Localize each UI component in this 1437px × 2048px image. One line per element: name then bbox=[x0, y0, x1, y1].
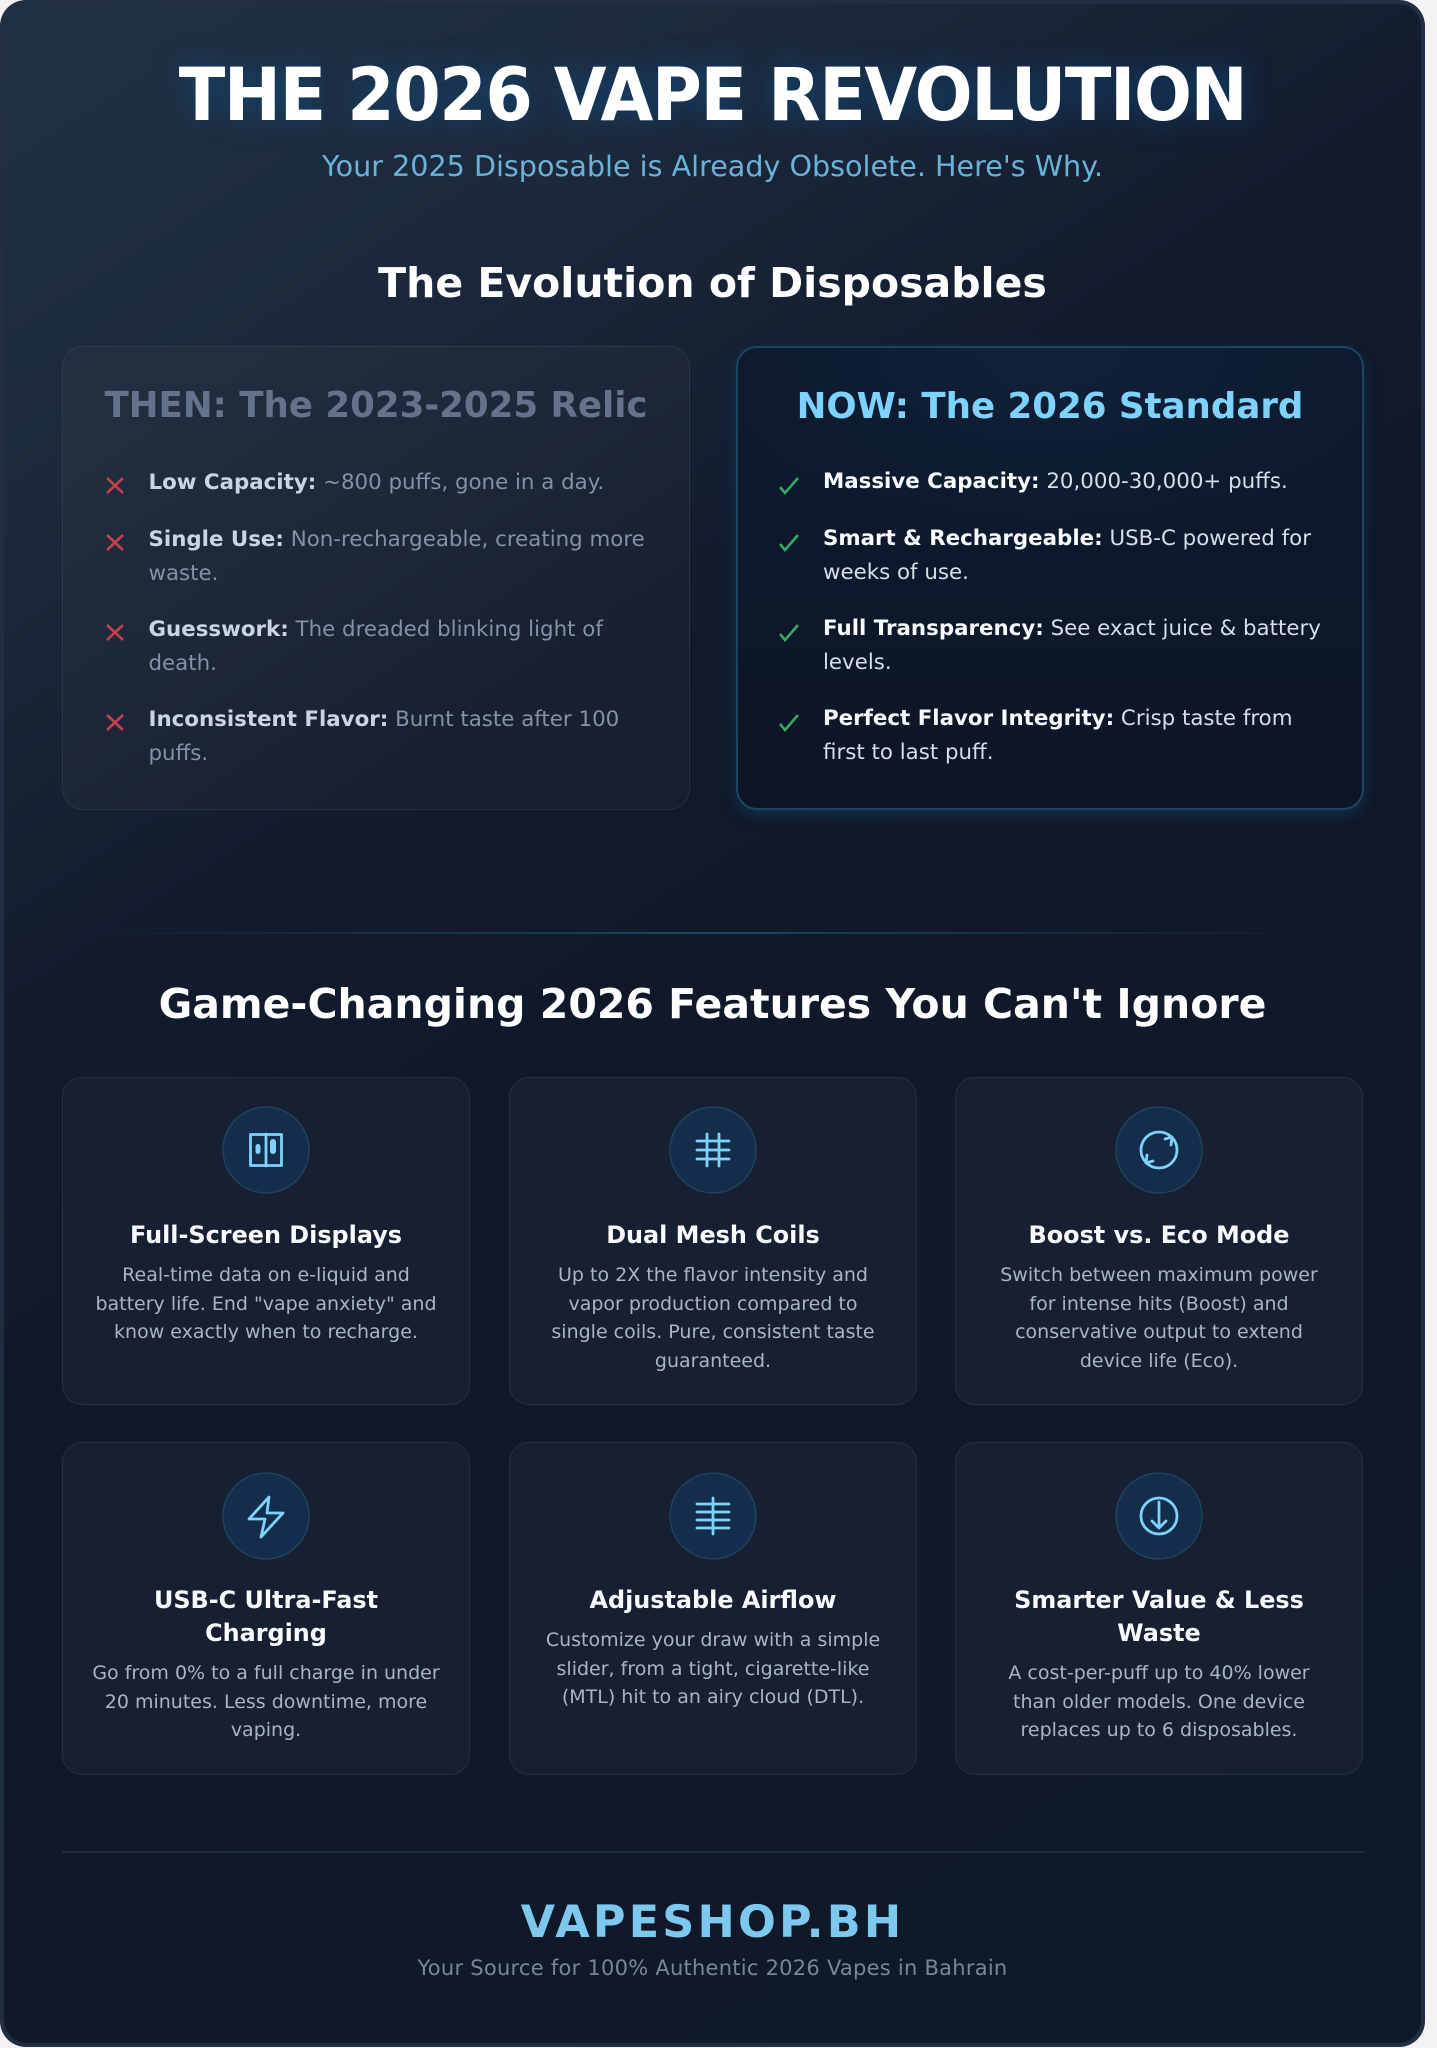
icon: down arrow in circle bbox=[1115, 1472, 1203, 1560]
list item: perfect flavor integrity: Perfect Flavor Integrity: Crisp taste from bbox=[823, 706, 1292, 731]
card text: single coils. Pure, consistent taste bbox=[551, 1321, 875, 1343]
card: full-screen displays bbox=[62, 1077, 470, 1405]
card heading: Full-Screen Displays bbox=[130, 1221, 402, 1249]
list item: single use: waste. bbox=[148, 561, 218, 586]
icon: red cross bbox=[106, 624, 124, 641]
list item: full transparency: Full Transparency: See exact juice & battery bbox=[823, 616, 1321, 641]
icon: green check bbox=[779, 477, 799, 495]
panel: now bbox=[736, 346, 1364, 810]
icon: green check bbox=[779, 534, 799, 552]
list item: inconsistent flavor: puffs. bbox=[148, 741, 208, 766]
footer tagline: Your Source for 100% Authentic 2026 Vapes in Bahrain bbox=[418, 1956, 1007, 1980]
list item: inconsistent flavor: Inconsistent Flavor: Burnt taste after 100 bbox=[148, 706, 619, 732]
card text bbox=[1008, 1662, 1310, 1741]
card heading: Boost vs. Eco Mode bbox=[1029, 1221, 1289, 1249]
list item: full transparency: levels. bbox=[823, 650, 892, 675]
card text: Customize your draw with a simple bbox=[546, 1629, 880, 1651]
subtitle: Your 2025 Disposable is Already Obsolete. Here's Why. bbox=[322, 149, 1103, 183]
list item: smart and rechargeable: Smart & Rechargeable: USB-C powered for bbox=[823, 526, 1311, 551]
list item: perfect flavor integrity: first to last puff. bbox=[823, 740, 994, 765]
icon: airflow slider bbox=[669, 1472, 757, 1560]
list item: guesswork: death. bbox=[148, 651, 217, 676]
icon: lightning bolt bbox=[222, 1472, 310, 1560]
card heading: Adjustable Airflow bbox=[589, 1586, 836, 1614]
footer brand: VAPESHOP.BH bbox=[521, 1897, 904, 1948]
list item: guesswork bbox=[148, 616, 604, 676]
card: dual mesh coils bbox=[509, 1077, 917, 1405]
card text: vaping. bbox=[231, 1719, 301, 1741]
card text: (MTL) hit to an airy cloud (DTL). bbox=[562, 1686, 864, 1708]
card text: know exactly when to recharge. bbox=[114, 1321, 418, 1343]
icon: green check bbox=[779, 714, 799, 732]
card text: device life (Eco). bbox=[1080, 1350, 1238, 1372]
card text: Real-time data on e-liquid and bbox=[122, 1264, 410, 1286]
card text: conservative output to extend bbox=[1015, 1321, 1303, 1343]
list item: single use bbox=[148, 526, 645, 586]
list item: massive capacity: Massive Capacity: 20,000-30,000+ puffs. bbox=[823, 469, 1288, 494]
card heading bbox=[1014, 1586, 1304, 1647]
panel heading: then: THEN: The 2023-2025 Relic bbox=[104, 385, 648, 426]
card text bbox=[1000, 1264, 1318, 1372]
card text: Switch between maximum power bbox=[1000, 1264, 1318, 1286]
list item: guesswork: Guesswork: The dreaded blinking light of bbox=[148, 616, 603, 642]
card text: replaces up to 6 disposables. bbox=[1021, 1719, 1297, 1741]
title: THE 2026 VAPE REVOLUTION bbox=[179, 53, 1246, 138]
card text: battery life. End "vape anxiety" and bbox=[95, 1293, 437, 1315]
panel: then bbox=[62, 346, 690, 810]
card: usb-c charging bbox=[62, 1442, 470, 1775]
card text: Go from 0% to a full charge in under bbox=[92, 1662, 440, 1684]
card text: Up to 2X the flavor intensity and bbox=[558, 1264, 868, 1286]
list item: smart and rechargeable bbox=[823, 526, 1312, 585]
card text bbox=[551, 1264, 875, 1372]
card: adjustable airflow bbox=[509, 1442, 917, 1775]
icon: mode cycle bbox=[1115, 1106, 1203, 1194]
card text bbox=[92, 1662, 440, 1741]
card text: 20 minutes. Less downtime, more bbox=[105, 1691, 427, 1713]
card text: A cost-per-puff up to 40% lower bbox=[1008, 1662, 1310, 1684]
card heading: Waste bbox=[1117, 1619, 1201, 1647]
card: boost vs eco mode bbox=[955, 1077, 1363, 1405]
list item: perfect flavor integrity bbox=[823, 706, 1292, 765]
heading: game-changing features: Game-Changing 2026 Features You Can't Ignore bbox=[159, 980, 1266, 1028]
card heading bbox=[154, 1586, 378, 1647]
list item: full transparency bbox=[823, 616, 1321, 675]
icon: red cross bbox=[106, 534, 124, 551]
card: smarter value bbox=[955, 1442, 1363, 1775]
card text: guaranteed. bbox=[655, 1350, 771, 1372]
list item: single use: Single Use: Non-rechargeable, creating more bbox=[148, 526, 645, 552]
card text: for intense hits (Boost) and bbox=[1029, 1293, 1289, 1315]
card text: than older models. One device bbox=[1013, 1691, 1305, 1713]
icon: display bbox=[222, 1106, 310, 1194]
card heading: Dual Mesh Coils bbox=[606, 1221, 820, 1249]
list item: smart and rechargeable: weeks of use. bbox=[823, 560, 969, 585]
card text: slider, from a tight, cigarette-like bbox=[557, 1658, 869, 1680]
card text bbox=[546, 1629, 880, 1708]
panel heading: now: NOW: The 2026 Standard bbox=[797, 386, 1303, 427]
list item: low capacity: Low Capacity: ~800 puffs, gone in a day. bbox=[148, 470, 604, 494]
icon: mesh grid bbox=[669, 1106, 757, 1194]
icon: red cross bbox=[106, 714, 124, 731]
list item: inconsistent flavor bbox=[148, 706, 619, 766]
card text bbox=[95, 1264, 437, 1343]
card heading: Smarter Value & Less bbox=[1014, 1586, 1304, 1614]
heading: evolution of disposables: The Evolution of Disposables bbox=[378, 258, 1047, 306]
card heading: Charging bbox=[205, 1619, 327, 1647]
card text: vapor production compared to bbox=[568, 1293, 858, 1315]
icon: red cross bbox=[106, 477, 124, 494]
card heading: USB-C Ultra-Fast bbox=[154, 1586, 378, 1614]
icon: green check bbox=[779, 624, 799, 642]
